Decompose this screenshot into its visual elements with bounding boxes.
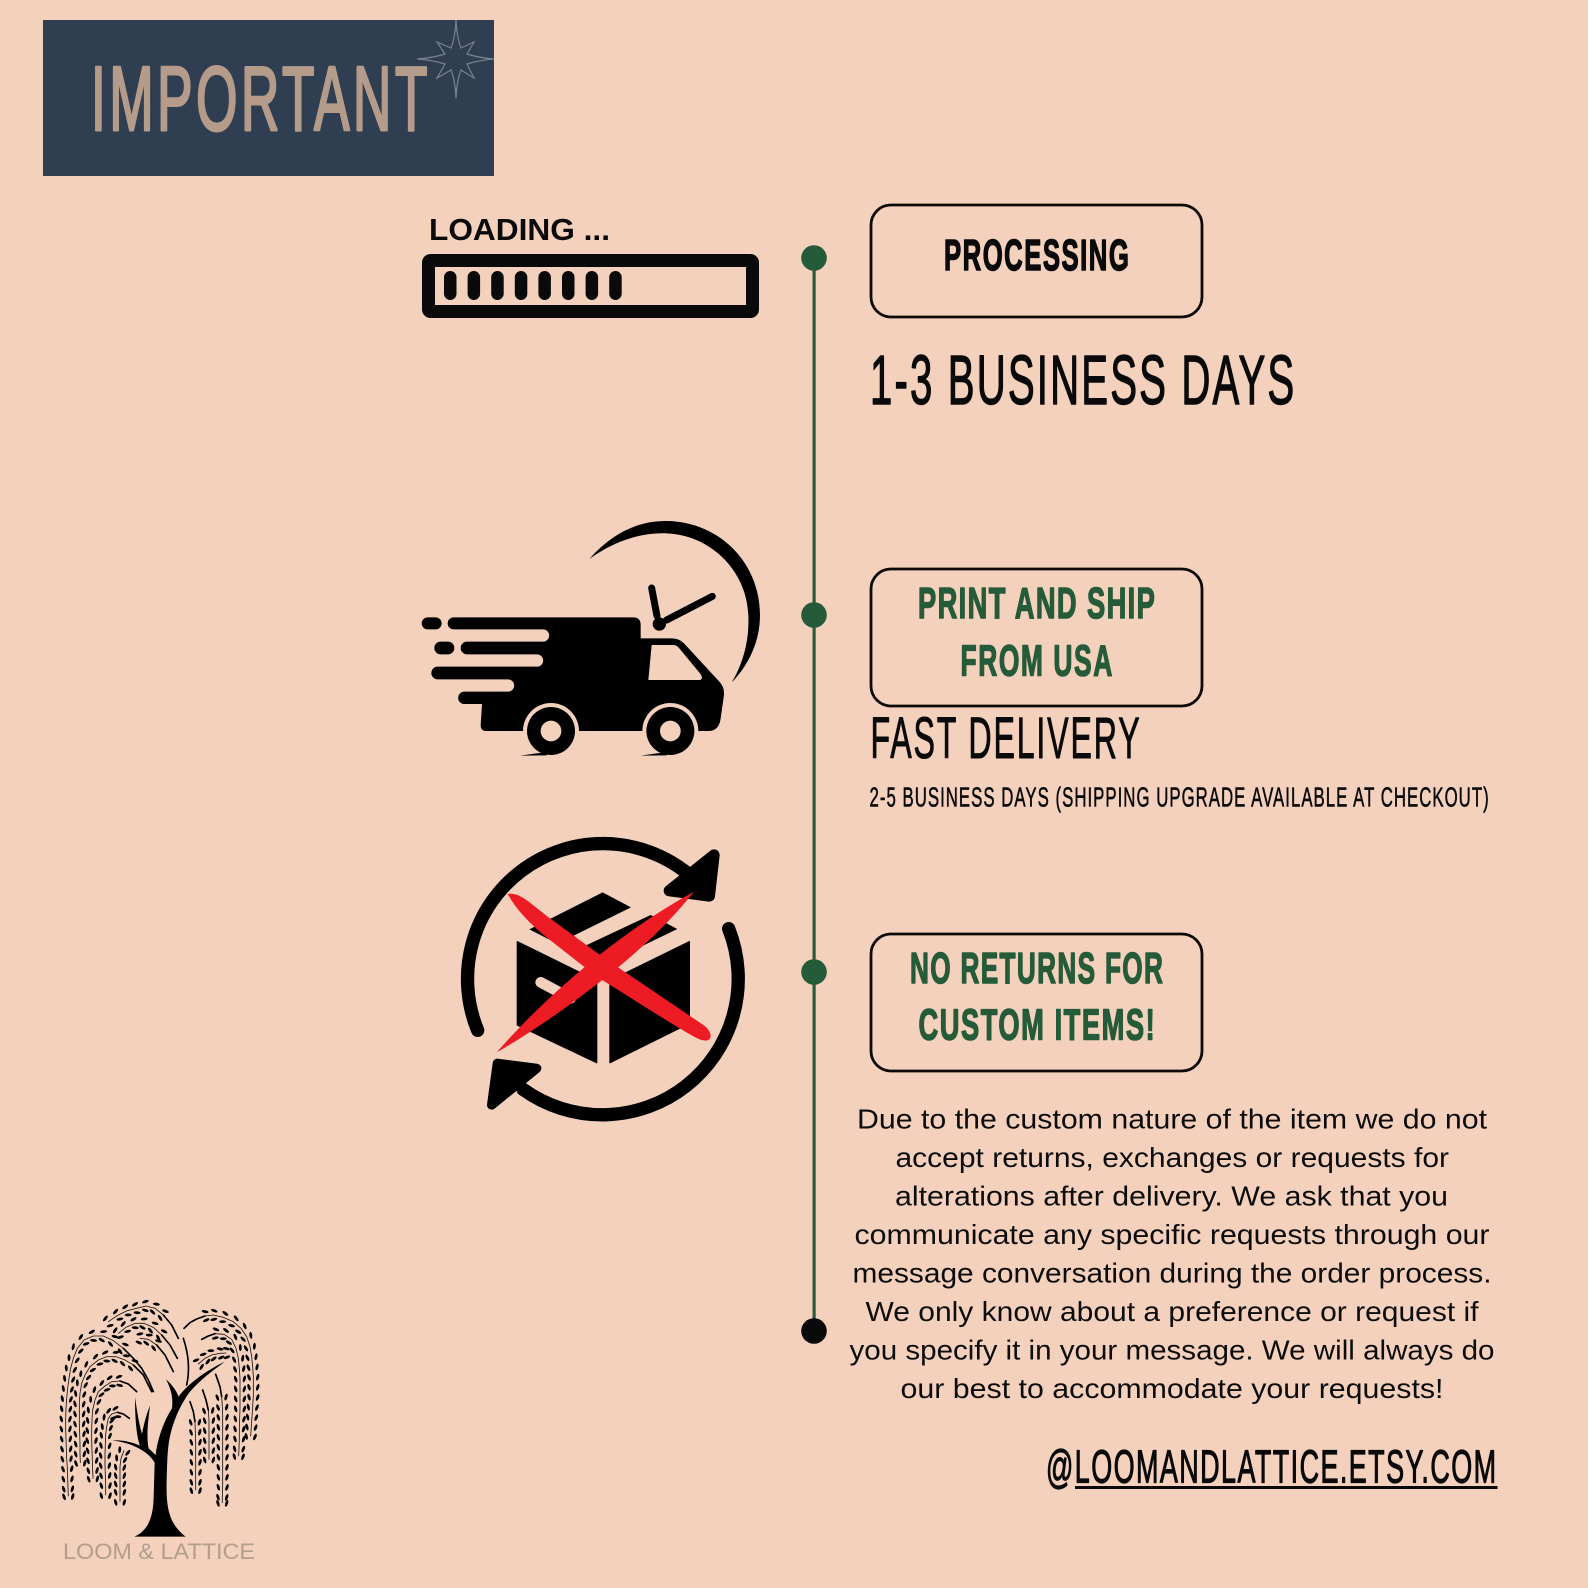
- panel: processing: [871, 205, 1202, 317]
- text block: returns policy: [850, 1104, 1494, 1404]
- text block: returns policy: our best to accommodate your requests!: [900, 1373, 1444, 1404]
- logo wordmark: LOOM & LATTICE: [63, 1539, 255, 1564]
- text block: returns policy: message conversation during the order process.: [852, 1258, 1492, 1288]
- icon: delivery truck with clock: [422, 521, 760, 761]
- text block: returns policy: Due to the custom nature of the item we do not: [857, 1104, 1487, 1134]
- panel: no returns: NO RETURNS FOR: [910, 943, 1163, 993]
- text block: returns policy: communicate any specific requests through our: [854, 1219, 1490, 1250]
- icon: sparkle star: [417, 20, 494, 98]
- panel: print and ship: PRINT AND SHIP: [918, 578, 1155, 628]
- logo: willow tree: [66, 1306, 253, 1537]
- panel: no returns: [871, 934, 1202, 1071]
- panel: processing: PROCESSING: [944, 230, 1129, 280]
- icon: loading bar: LOADING ...: [429, 212, 610, 247]
- icon: loading bar: [428, 212, 752, 312]
- text: fast delivery: FAST DELIVERY: [870, 706, 1140, 770]
- text: 1-3 business days: 1-3 BUSINESS DAYS: [870, 341, 1294, 420]
- heading: important: IMPORTANT: [91, 48, 427, 150]
- icon: no returns box: [468, 844, 738, 1115]
- banner: important: [43, 20, 494, 176]
- timeline: [801, 245, 827, 1344]
- panel: print and ship: FROM USA: [960, 635, 1112, 685]
- text: shipping note: 2-5 BUSINESS DAYS (SHIPPING UPGRADE AVAILABLE AT CHECKOUT): [870, 781, 1489, 813]
- text block: returns policy: We only know about a preference or request if: [866, 1296, 1479, 1327]
- panel: print and ship: [871, 569, 1202, 706]
- text block: returns policy: alterations after delivery. We ask that you: [895, 1180, 1448, 1212]
- panel: no returns: CUSTOM ITEMS!: [918, 1000, 1155, 1049]
- text block: returns policy: accept returns, exchanges or requests for: [896, 1142, 1449, 1173]
- link: etsy shop: @LOOMANDLATTICE.ETSY.COM: [1046, 1442, 1496, 1494]
- text block: returns policy: you specify it in your message. We will always do: [850, 1334, 1494, 1366]
